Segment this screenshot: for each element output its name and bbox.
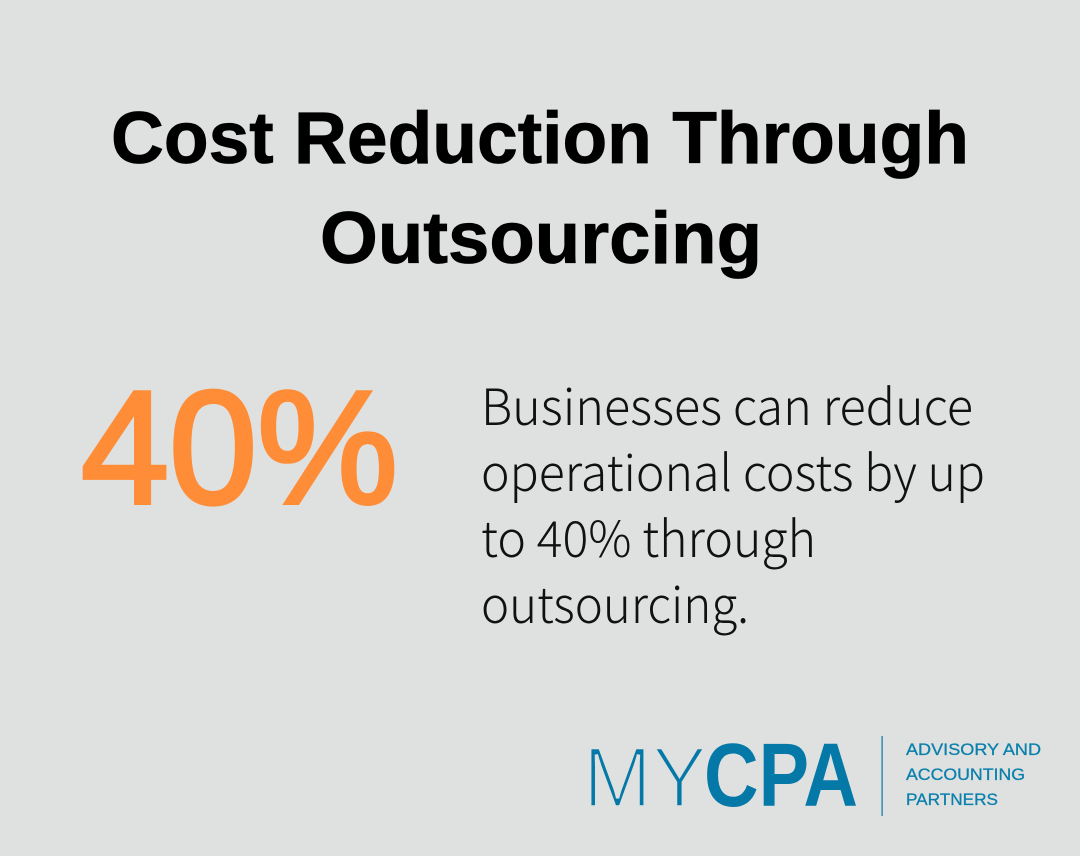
logo tagline: ADVISORY AND (906, 740, 1041, 759)
logo tagline: ACCOUNTING (906, 765, 1025, 784)
description text: Businesses can reduce (481, 368, 973, 440)
logo tagline: PARTNERS (906, 790, 998, 809)
description text: outsourcing. (481, 566, 749, 638)
title: Cost Reduction Through (111, 98, 969, 179)
title (111, 98, 969, 279)
description text: operational costs by up (481, 434, 985, 506)
description text (481, 368, 985, 638)
description text: to 40% through (481, 500, 816, 572)
logo wordmark light part: MY (583, 730, 707, 826)
title: Outsourcing (320, 198, 762, 279)
logo: MYCPA (583, 726, 1041, 826)
logo wordmark bold part: CPA (704, 726, 858, 826)
logo divider (882, 736, 883, 816)
logo tagline (906, 740, 1041, 809)
statistic: 40%: 40% (81, 358, 398, 538)
